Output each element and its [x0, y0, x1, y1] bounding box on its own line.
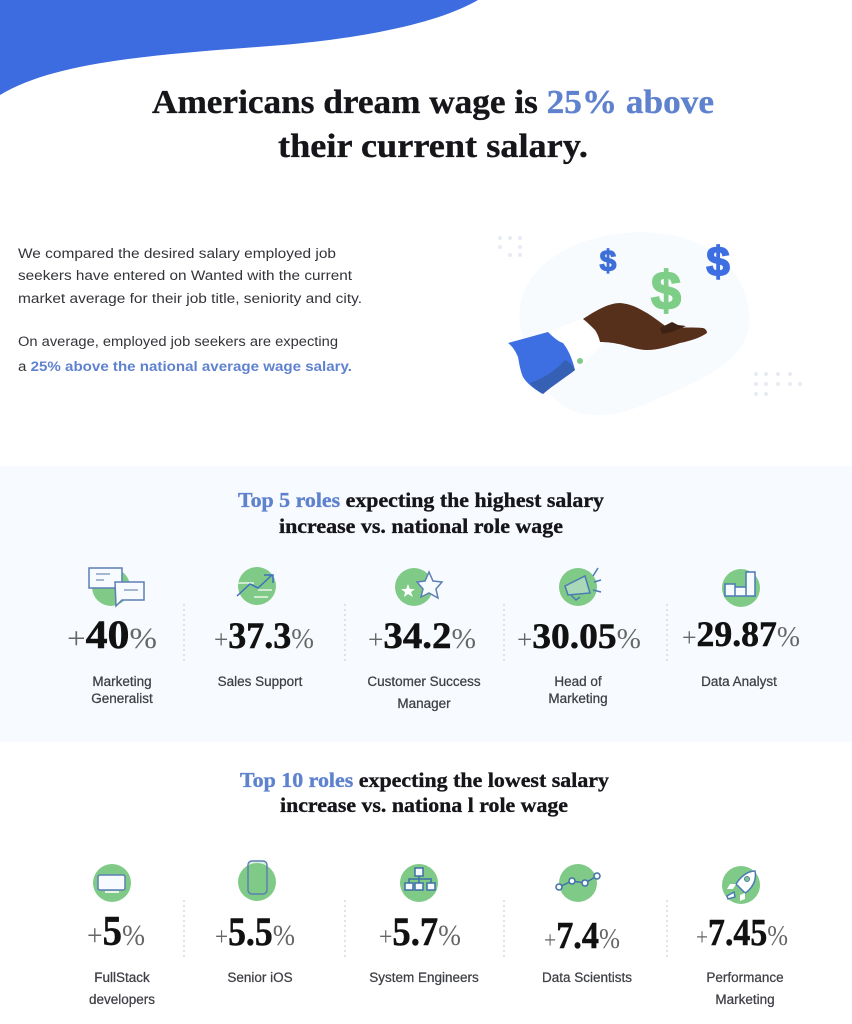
- stat: fullstack developers: +5%: [87, 909, 145, 955]
- intro text block: [18, 246, 362, 374]
- title: [152, 84, 714, 165]
- icon: dollar signs: [600, 238, 730, 321]
- heading: top 5: [238, 488, 605, 538]
- stat: marketing generalist: Marketing: [92, 674, 152, 689]
- stat: fullstack developers: developers: [89, 992, 155, 1007]
- heading: top 5: Top 5 roles expecting the highest salary: [238, 488, 605, 512]
- stat: sales support: [214, 616, 314, 689]
- heading: top 5: increase vs. national role wage: [279, 514, 563, 538]
- stat: senior ios: Senior iOS: [227, 970, 293, 985]
- stat: customer success manager: +34.2%: [368, 616, 476, 657]
- stat: customer success manager: Customer Success: [367, 674, 481, 689]
- title: their current salary.: [278, 128, 588, 165]
- icon: growth chart: [237, 567, 276, 605]
- icon: line chart: [556, 864, 600, 902]
- stat: senior ios: +5.5%: [215, 909, 295, 954]
- intro text block: We compared the desired salary employed job: [18, 246, 336, 261]
- stat: head of marketing: Head of: [554, 674, 602, 689]
- icon: star: [395, 568, 442, 606]
- icon: chat bubbles: [89, 568, 144, 606]
- stat: data scientists: +7.4%: [544, 915, 620, 957]
- stat: performance marketing: [696, 912, 788, 1007]
- stat: head of marketing: Marketing: [548, 691, 608, 706]
- icon: megaphone: [559, 568, 601, 606]
- stat: data analyst: [682, 614, 800, 689]
- stat: data analyst: +29.87%: [682, 614, 800, 654]
- icon: org chart: [400, 864, 438, 902]
- illustration: hand with dollars: [498, 232, 802, 415]
- stat: system engineers: System Engineers: [369, 970, 479, 985]
- stat: data analyst: Data Analyst: [701, 674, 777, 689]
- stat: sales support: Sales Support: [218, 674, 303, 689]
- stat: customer success manager: Manager: [397, 696, 451, 711]
- heading: top 10: Top 10 roles expecting the lowest salary: [240, 768, 610, 792]
- stat: marketing generalist: Generalist: [91, 691, 153, 706]
- stat: performance marketing: Performance: [706, 970, 784, 985]
- stat: fullstack developers: [87, 909, 155, 1007]
- panel: top 5 band: [0, 466, 852, 742]
- stat: senior ios: [215, 909, 295, 985]
- stat: performance marketing: Marketing: [715, 992, 775, 1007]
- heading: top 10: [240, 768, 610, 817]
- heading: top 10: increase vs. nationa l role wage: [280, 793, 568, 817]
- title: Americans dream wage is 25% above: [152, 84, 714, 121]
- stat: head of marketing: [517, 616, 641, 706]
- stat: data scientists: Data Scientists: [542, 970, 632, 985]
- stat: sales support: +37.3%: [214, 616, 314, 657]
- stat: performance marketing: +7.45%: [696, 912, 788, 954]
- stat: head of marketing: +30.05%: [517, 616, 641, 656]
- stat: marketing generalist: +40%: [67, 612, 157, 657]
- icon: dollar signs: $: [706, 238, 730, 285]
- intro text block: On average, employed job seekers are expecting: [18, 334, 338, 349]
- icon: phone: [238, 861, 276, 901]
- dividers top: [184, 604, 667, 662]
- icon: rocket: [722, 866, 760, 904]
- stat: customer success manager: [367, 616, 481, 711]
- icon: dollar signs: $: [600, 245, 617, 278]
- top blue wave: [0, 0, 478, 95]
- intro text block: market average for their job title, seniority and city.: [18, 291, 362, 306]
- stat: data scientists: [542, 915, 632, 985]
- icon: monitor: [93, 864, 131, 902]
- stat: fullstack developers: FullStack: [94, 970, 150, 985]
- intro text block: seekers have entered on Wanted with the current: [18, 268, 352, 283]
- intro text block: a 25% above the national average wage salary.: [18, 359, 352, 374]
- stat: system engineers: +5.7%: [379, 909, 461, 954]
- icon: bar chart: [722, 569, 760, 607]
- stat: system engineers: [369, 909, 479, 985]
- stat: marketing generalist: [67, 612, 157, 706]
- icon: dollar signs: $: [651, 261, 681, 321]
- dividers bottom: [184, 900, 667, 958]
